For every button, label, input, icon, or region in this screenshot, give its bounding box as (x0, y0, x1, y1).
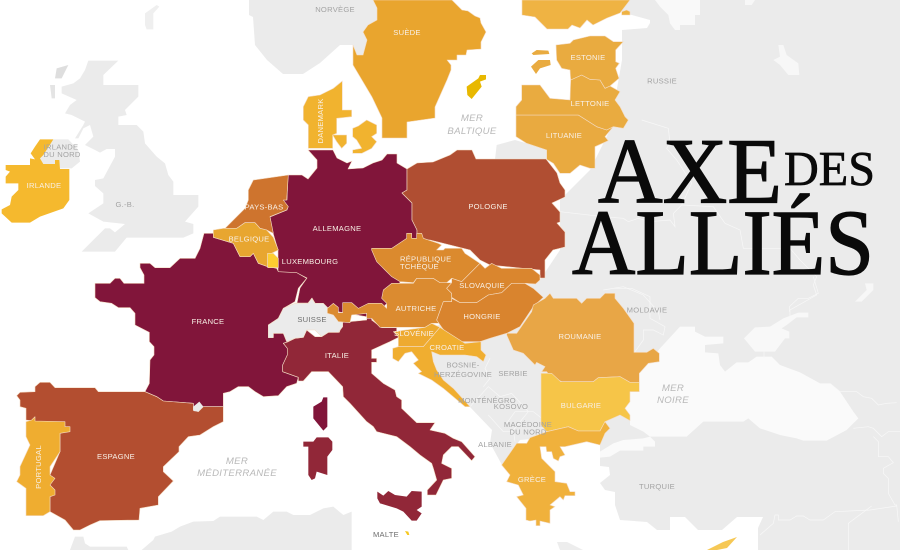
label: Bulgaria: BULGARIE (561, 401, 601, 410)
land: Norway (249, 0, 377, 74)
label: Baltic Sea: MER (461, 113, 483, 124)
country: Lithuania (516, 115, 613, 173)
country: Poland (402, 150, 565, 278)
country: Germany (270, 150, 417, 320)
country: Luxembourg (268, 253, 278, 268)
country: Austria (327, 278, 452, 327)
label: North Macedonia: DU NORD (509, 428, 547, 436)
label: Bosnia-Herzegovina: BOSNIE- (447, 360, 479, 370)
label: Montenegro: MONTÉNÉGRO (458, 396, 516, 405)
label: Moldova: MOLDAVIE (627, 306, 667, 314)
land: North Africa west (70, 537, 128, 550)
land: eastern Europe, Russia and Turkey (430, 0, 900, 550)
label: Northern Ireland: DU NORD (43, 150, 81, 159)
label: Netherlands: PAYS-BAS (245, 202, 283, 212)
country: Sweden (353, 0, 486, 138)
label: Spain: ESPAGNE (97, 452, 135, 461)
title (572, 120, 875, 295)
lake: Rybinsk (855, 283, 873, 302)
country: Ireland (2, 139, 69, 223)
label: Mediterranean Sea: MER (226, 456, 248, 467)
sea: Sea of Marmara (600, 437, 655, 458)
land: Crete (557, 542, 583, 550)
country: Portugal (17, 417, 70, 516)
label: Luxembourg: LUXEMBOURG (282, 257, 338, 266)
label: Baltic Sea: BALTIQUE (447, 126, 497, 137)
label: Malta: MALTE (373, 530, 399, 539)
country: Italy (283, 313, 475, 495)
label: Lithuania: LITUANIE (546, 131, 582, 140)
country: Andorra (193, 402, 203, 412)
country: Switzerland (268, 298, 343, 342)
label: Croatia: CROATIE (430, 343, 464, 352)
label: Germany: ALLEMAGNE (313, 224, 361, 233)
land: North Africa (142, 507, 352, 550)
label: Slovakia: SLOVAQUIE (459, 281, 505, 290)
country: Croatia (393, 327, 486, 407)
country: Romania (507, 293, 659, 382)
label: Greece: GRÈCE (518, 475, 546, 484)
label: Belgium: BELGIQUE (229, 234, 269, 244)
lake: Onega (773, 45, 799, 75)
label: Slovenia: SLOVÉNIE (394, 329, 434, 338)
country: Estonia (556, 36, 623, 88)
lake: Ladoga (655, 0, 700, 30)
label: Portugal: PORTUGAL (34, 445, 43, 489)
country: Bulgaria (541, 373, 639, 432)
sea: Sea of Azov (744, 313, 808, 352)
country: Greece (502, 422, 610, 526)
title word: AXE: AXE (598, 120, 782, 224)
country: Malta (405, 531, 409, 535)
country: Hungary (437, 283, 543, 342)
label: Great Britain: G.-B. (116, 200, 134, 209)
label: Norway: NORVÈGE (315, 5, 355, 14)
country: Belgium (213, 223, 278, 267)
land: Great Britain (62, 61, 198, 252)
label: Mediterranean Sea: MÉDITERRANÉE (197, 468, 277, 479)
country: France (95, 233, 307, 412)
label: Czech Republic: RÉPUBLIQUE (400, 254, 451, 264)
label: France: FRANCE (192, 317, 224, 326)
country: Sicily (377, 491, 422, 521)
land: Hebrides south island (50, 85, 55, 98)
land: Kaliningrad (495, 140, 547, 159)
lake: northern (745, 0, 755, 5)
label: Sweden: SUÈDE (393, 28, 421, 37)
label: Albania: ALBANIE (478, 440, 512, 449)
eastern border lines (470, 120, 900, 550)
land: Northern Ireland (40, 139, 80, 168)
country labels (27, 5, 689, 539)
country: Finland islet (622, 10, 630, 15)
country: Finland (522, 0, 630, 29)
label: Poland: POLOGNE (468, 202, 508, 211)
label: Hungary: HONGRIE (463, 312, 501, 321)
label: Romania: ROUMANIE (559, 332, 601, 341)
label: Russia: RUSSIE (647, 76, 677, 86)
country: Estonia, Saaremaa (531, 60, 551, 74)
label: Kosovo: KOSOVO (494, 402, 528, 411)
label: Turkey: TURQUIE (639, 482, 675, 491)
label: Denmark: DANEMARK (316, 98, 325, 144)
country: Slovenia (393, 323, 440, 347)
title word: DES: DES (784, 141, 875, 196)
country: Sardinia (303, 437, 332, 480)
label: Italy: ITALIE (325, 351, 349, 360)
country: Czech Republic (372, 233, 480, 283)
label: Latvia: LETTONIE (570, 99, 610, 108)
label: Bosnia-Herzegovina: HERZÉGOVINE (434, 370, 492, 379)
land: Hebrides island (55, 65, 68, 78)
label: Ireland: IRLANDE (27, 181, 61, 190)
country: Cyprus (707, 537, 737, 550)
country: Denmark, Jutland (303, 81, 352, 148)
label: North Macedonia: MACÉDOINE (504, 420, 552, 429)
country: Denmark, Funen (333, 135, 347, 148)
country: Slovakia (447, 263, 540, 303)
country: Spain (17, 382, 223, 530)
label: Serbia: SERBIE (498, 369, 528, 378)
label: Switzerland: SUISSE (297, 315, 327, 324)
land: Shetland (145, 5, 159, 29)
label: Estonia: ESTONIE (571, 53, 605, 62)
label: Black Sea: NOIRE (657, 395, 689, 406)
country: Netherlands (225, 175, 288, 233)
country: Gotland (467, 75, 486, 99)
label: Czech Republic: TCHÈQUE (400, 262, 439, 271)
label: Northern Ireland: IRLANDE (44, 142, 78, 152)
country: Estonia, Hiiumaa (532, 50, 549, 55)
country: Latvia (516, 75, 628, 130)
label: Austria: AUTRICHE (396, 304, 436, 313)
label: Black Sea: MER (662, 383, 684, 394)
title word: ALLIÉS: ALLIÉS (572, 192, 874, 295)
country: Denmark, Zealand (353, 120, 377, 153)
sea: Black Sea (625, 327, 858, 441)
country: Corsica (313, 397, 327, 431)
